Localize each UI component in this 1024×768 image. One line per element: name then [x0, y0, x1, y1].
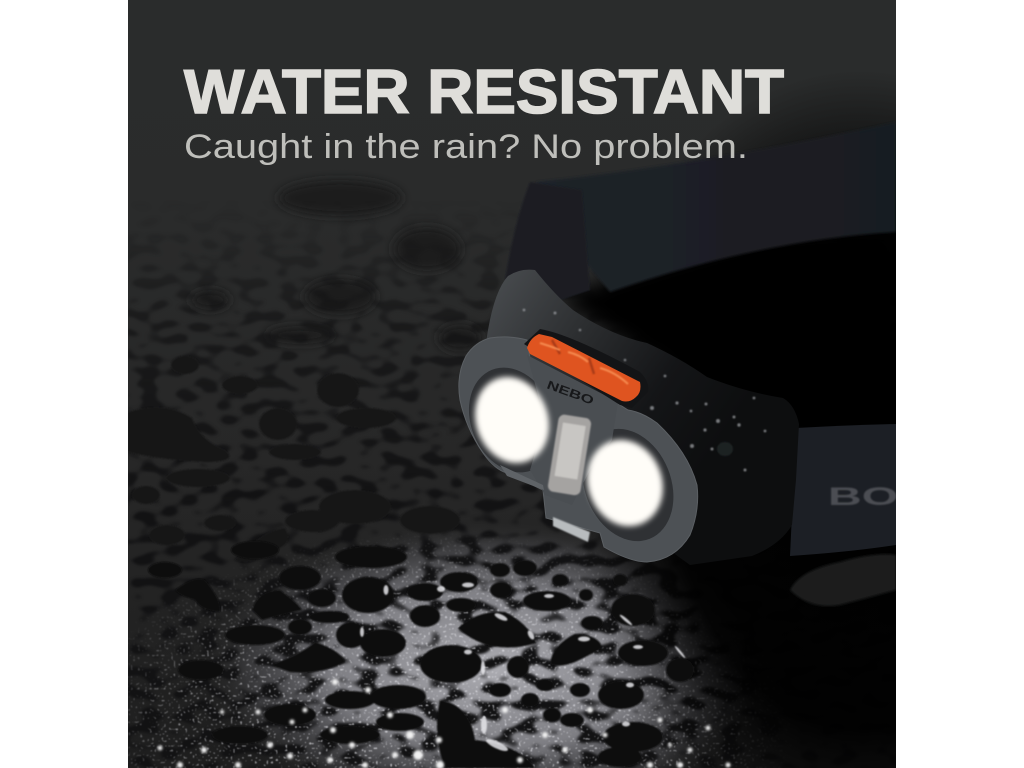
center plate [529, 356, 618, 492]
bottom clip [553, 517, 590, 542]
droplet texture [128, 261, 734, 768]
left lens glow [470, 372, 554, 468]
right lens recess [584, 428, 674, 542]
model logo: NEBO [545, 378, 596, 408]
sparkling micro droplets [128, 538, 765, 768]
right lens glow [583, 435, 668, 531]
rear headband [536, 122, 896, 292]
droplet on housing [717, 442, 733, 456]
strap lettering: BO [828, 483, 898, 511]
headlamp [454, 270, 898, 565]
button slot [524, 329, 636, 406]
side headband [790, 424, 898, 556]
blurred distant droplets [190, 180, 482, 352]
strap buckle [505, 182, 590, 300]
puddle right [790, 554, 896, 606]
left lens recess [469, 368, 538, 472]
dark void under strap [563, 262, 723, 354]
spotlight pool on surface [226, 536, 722, 768]
subtitle: Caught in the rain? No problem. [184, 128, 748, 166]
wet surface background [128, 0, 896, 768]
shadow beneath headband [596, 100, 896, 768]
frame seam left [500, 465, 544, 490]
orange power button [527, 334, 640, 402]
large droplets in spotlight [148, 541, 694, 768]
large droplets left field [128, 356, 460, 562]
bokeh highlights at bottom [158, 679, 730, 768]
title: WATER RESISTANT [184, 58, 784, 127]
front frame [459, 337, 698, 562]
infographic canvas [128, 0, 896, 768]
droplet specular highlights [360, 582, 686, 753]
rubber housing [480, 270, 799, 565]
red LED panel [547, 414, 592, 496]
photo panel [128, 0, 898, 768]
water beads on housing [523, 309, 766, 472]
